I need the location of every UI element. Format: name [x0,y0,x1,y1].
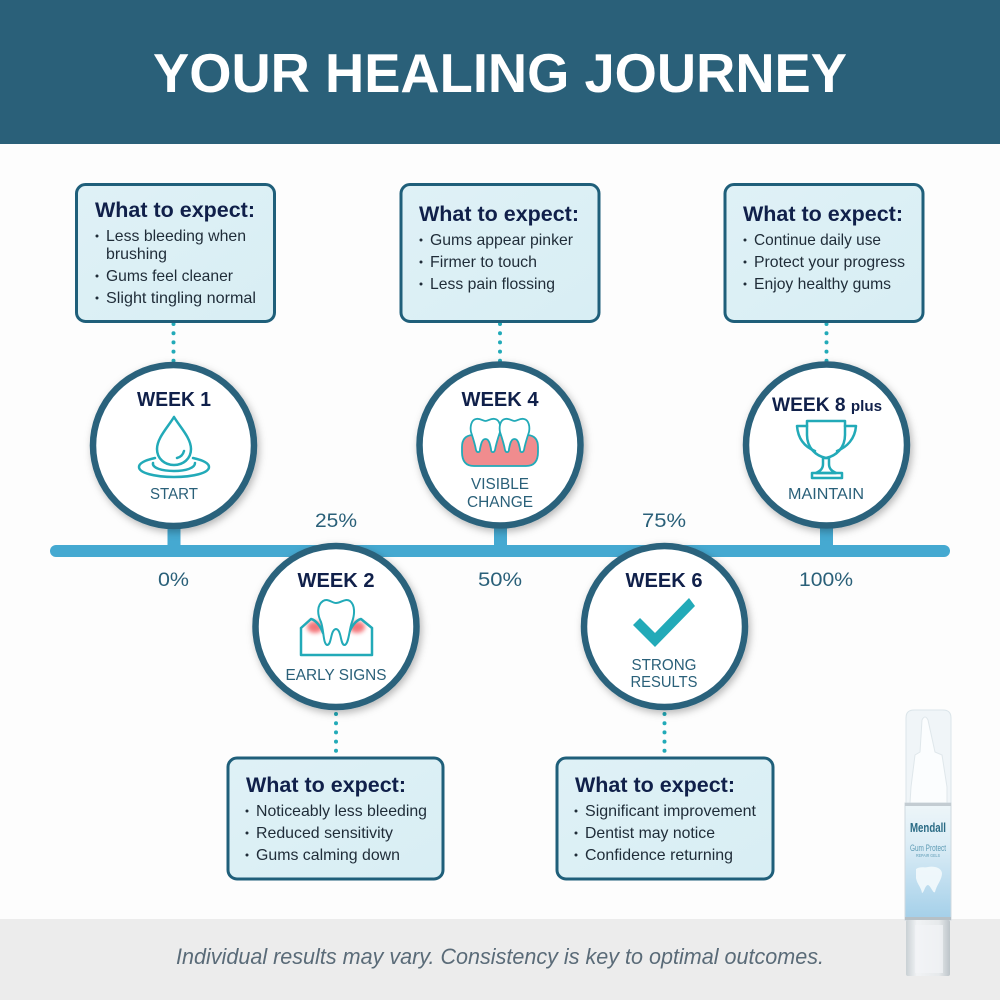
connector: week 1 [172,324,176,362]
panel: week 4 expectations: Gums appear pinker [430,232,574,249]
milestone: week 8 plus: WEEK 8 plus [772,395,882,416]
panel: week 6 expectations: Dentist may notice [585,825,715,842]
milestone: week 2 [256,546,416,707]
panel: week 8 expectations [725,184,923,322]
milestone: week 6: RESULTS [630,674,698,691]
panel: week 1 expectations: Gums feel cleaner [106,268,234,285]
panel: week 8 expectations: Enjoy healthy gums [754,276,891,293]
milestone: week 8 plus: MAINTAIN [788,486,864,503]
product: gel pen: Mendall [910,820,946,835]
panel: week 1 expectations: brushing [106,246,167,263]
milestone: week 1: WEEK 1 [137,389,211,411]
icon: check mark [633,598,695,647]
panel: week 6 expectations: Confidence returning [585,847,733,864]
milestone: week 6: WEEK 6 [626,570,702,592]
panel: week 2 expectations: What to expect: [246,774,406,797]
timeline bar [50,526,950,557]
connector: week 8 [824,324,828,362]
panel: week 4 expectations [401,184,599,322]
header banner [0,0,1000,144]
disclaimer: Individual results may vary. Consistency is key to optimal outcomes. [176,944,824,969]
milestone: week 2: WEEK 2 [298,570,374,592]
milestone: week 8 plus [746,364,907,526]
panel: week 1 expectations: What to expect: [95,199,255,222]
percent labels: 100% [799,570,853,591]
panel: week 8 expectations: Continue daily use [754,232,881,249]
panel: week 8 expectations: Protect your progress [754,254,905,271]
milestone: week 4: CHANGE [467,494,533,511]
milestone: week 1: START [150,486,198,503]
percent labels [158,511,853,591]
product: gel pen [905,710,951,976]
panel: week 6 expectations: What to expect: [575,774,735,797]
icon: trophy [797,421,856,478]
product: gel pen: Gum Protect [910,843,946,853]
milestone: week 6: STRONG [632,657,696,674]
panel: week 1 expectations [76,184,274,322]
percent labels: 0% [158,570,189,591]
icon: healthy teeth and pink gums [462,419,538,466]
connector: week 6 [662,714,666,753]
percent labels: 75% [642,511,686,532]
milestone: week 1 [93,365,254,526]
panel: week 2 expectations [228,758,443,879]
panel: week 1 expectations: Less bleeding when [106,228,246,245]
panel: week 6 expectations [557,758,773,879]
title: YOUR HEALING JOURNEY [153,42,847,104]
milestone: week 6 [584,546,745,707]
percent labels: 50% [478,570,522,591]
panel: week 4 expectations: Less pain flossing [430,276,555,293]
connector: week 2 [334,714,338,753]
milestone: week 4: WEEK 4 [462,389,539,411]
milestone: week 2: EARLY SIGNS [286,667,386,684]
panel: week 2 expectations: Reduced sensitivity [256,825,393,842]
connector: week 4 [498,324,502,362]
panel: week 8 expectations: What to expect: [743,203,903,226]
panel: week 2 expectations: Noticeably less bleeding [256,803,427,820]
panel: week 4 expectations: What to expect: [419,203,579,226]
panel: week 2 expectations: Gums calming down [256,847,400,864]
footer band [0,919,1000,1000]
panel: week 6 expectations: Significant improvement [585,803,757,820]
icon: water drop [139,417,209,477]
icon: tooth with inflamed gums [301,600,372,655]
panel: week 4 expectations: Firmer to touch [430,254,537,271]
milestone: week 4: VISIBLE [471,476,529,493]
panel: week 1 expectations: Slight tingling normal [106,290,256,307]
product: gel pen: REPAIR GELS [916,853,940,858]
milestone: week 4 [420,364,580,526]
percent labels: 25% [315,511,357,532]
